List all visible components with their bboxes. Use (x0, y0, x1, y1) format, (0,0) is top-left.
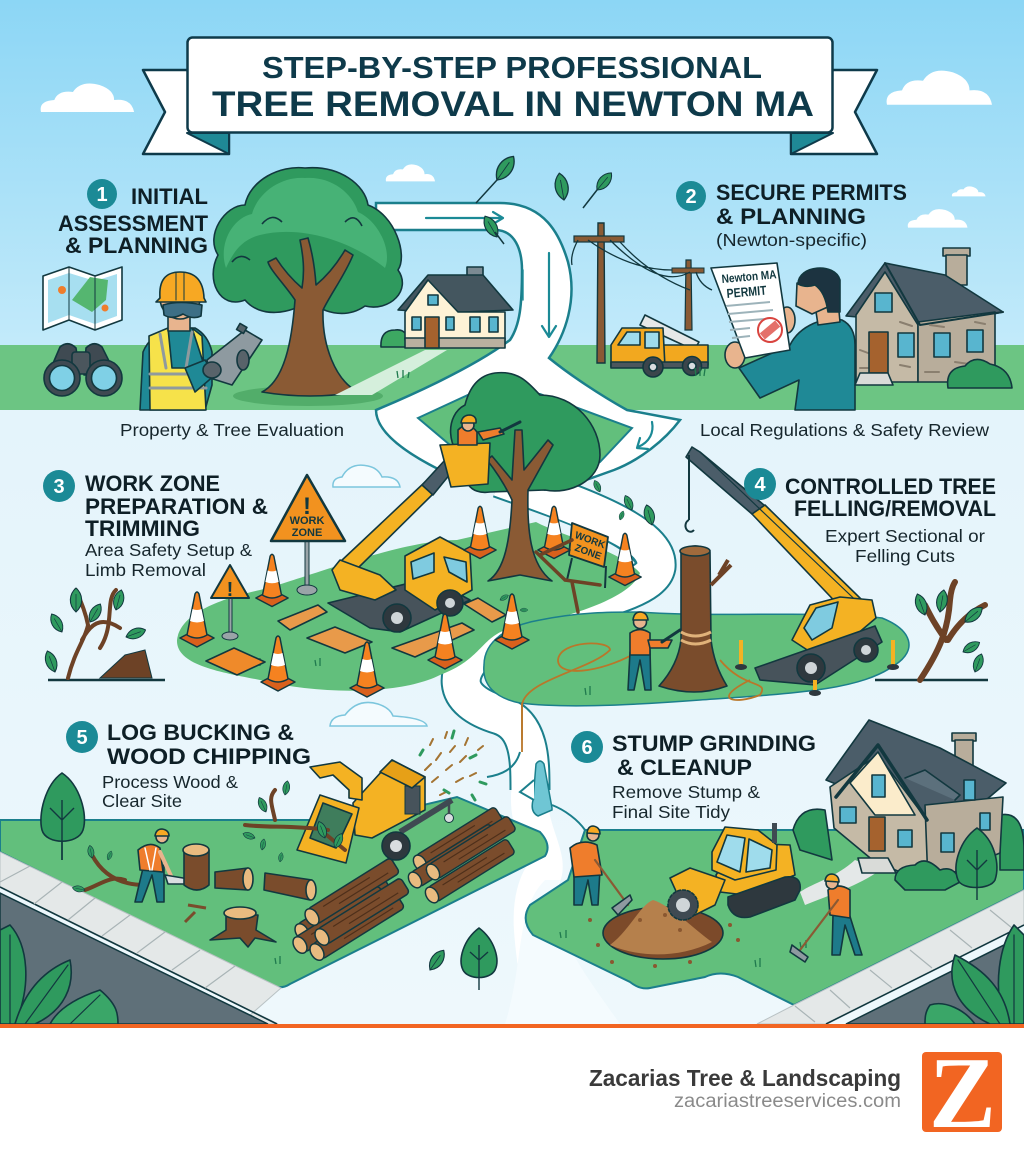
title banner (143, 38, 877, 154)
hopper (297, 795, 359, 863)
ribbon left (143, 70, 229, 154)
step 3 heading: TRIMMING (85, 516, 200, 541)
crane cab (792, 597, 876, 655)
illustration: bare tree left (42, 588, 165, 680)
permit document (711, 263, 790, 358)
boom (340, 482, 435, 572)
illustration: bucking worker and logs (72, 806, 516, 963)
step 5 heading: LOG BUCKING & (107, 720, 294, 745)
icon: work zone barricade (567, 523, 608, 588)
log round 1 (215, 868, 248, 890)
bucket worker (458, 415, 520, 445)
step 6 heading: Remove Stump & (612, 782, 760, 802)
illustration: map (43, 267, 122, 330)
garden tree (956, 828, 997, 888)
worker (135, 829, 195, 902)
bucket (440, 443, 490, 487)
upright log (184, 850, 209, 890)
crane carrier (755, 626, 882, 685)
step 4 heading: CONTROLLED TREE (785, 474, 996, 499)
step 6 heading: STUMP GRINDING (612, 731, 816, 756)
turret (332, 560, 396, 600)
wood bits (185, 905, 206, 922)
icon: big work zone sign: WORK (290, 515, 324, 527)
step 1 heading: 1 (96, 184, 108, 206)
step 2 heading (676, 180, 907, 250)
chip spray (420, 731, 486, 800)
step 3 heading: WORK ZONE (85, 471, 220, 496)
illustration: permit holder (711, 263, 855, 410)
crane hook line (688, 455, 690, 520)
cab (405, 537, 472, 610)
grinder head (670, 868, 725, 915)
trunk (262, 238, 358, 396)
right log pile (406, 806, 516, 905)
step 5 heading: 5 (76, 727, 88, 749)
step 2 heading: (Newton-specific) (716, 230, 867, 250)
step 4 heading: FELLING/REMOVAL (794, 496, 996, 521)
step 3 heading: PREPARATION & (85, 494, 268, 519)
step 1 heading: INITIAL (131, 184, 208, 209)
step 1 heading: & PLANNING (65, 233, 208, 258)
step 6 heading: 6 (581, 737, 593, 759)
sky background (0, 0, 1024, 411)
step 3 heading: Limb Removal (85, 560, 206, 580)
step 6 heading: & CLEANUP (617, 755, 752, 780)
footer background (0, 1028, 1024, 1154)
permit subheading: PERMIT (726, 283, 767, 301)
illustration: small house (381, 267, 513, 348)
illustration: driveway (335, 350, 447, 395)
step 3 heading: Area Safety Setup & (85, 540, 252, 560)
grass: work zone (177, 522, 640, 691)
footer accent line (0, 1024, 1024, 1028)
wheel (382, 832, 410, 860)
ribbon right (791, 70, 877, 154)
illustration: traffic cones (180, 506, 641, 697)
illustration: big tree (213, 168, 402, 406)
illustration: third house (793, 720, 1024, 905)
body (716, 843, 795, 895)
illustration: stump grinder (588, 823, 800, 968)
step 2 heading: SECURE PERMITS (716, 180, 907, 205)
step 4 heading: 4 (754, 474, 766, 496)
grass: chipping area (0, 797, 548, 987)
illustration: boom lift truck (328, 415, 520, 632)
canopy (213, 168, 402, 313)
chute (310, 762, 362, 800)
sawyer (628, 612, 680, 690)
step 5 heading: Process Wood & (102, 772, 238, 792)
footer company name: Zacarias Tree & Landscaping (589, 1065, 901, 1091)
chipper body (353, 760, 425, 838)
left log pile (290, 857, 410, 963)
illustration: surveyor worker (140, 272, 262, 410)
title line 2: TREE REMOVAL IN NEWTON MA (212, 85, 814, 124)
step 1 heading: ASSESSMENT (58, 211, 209, 236)
flatbed (328, 578, 470, 632)
cab (712, 827, 777, 880)
step 3 heading (43, 470, 268, 580)
illustration: fallen branch and debris (499, 479, 657, 612)
lower panel background (0, 410, 1024, 1025)
illustration: center tree canopy (451, 373, 600, 492)
illustration: stone house (846, 248, 1012, 388)
icon: big work zone sign: ZONE (292, 527, 322, 539)
clouds (41, 71, 992, 726)
step 4 heading (744, 468, 996, 566)
step 5 heading: WOOD CHIPPING (107, 744, 311, 769)
illustration: bare tree right (875, 582, 988, 680)
footer website: zacariastreeservices.com (674, 1091, 901, 1112)
footer logo: Z (929, 1037, 996, 1150)
illustration: crane and log (522, 447, 899, 740)
title line 1: STEP-BY-STEP PROFESSIONAL (262, 50, 762, 85)
banner box (188, 38, 832, 132)
illustration: raking workers (570, 826, 862, 962)
person (725, 268, 855, 410)
grass: felling area (484, 612, 909, 706)
illustration: corner plant right (925, 925, 1024, 1024)
icon: small warning sign: ! (227, 579, 233, 601)
top grass band (0, 345, 1024, 410)
stump (210, 915, 276, 947)
stamp (758, 318, 782, 342)
icon: small warning sign (211, 565, 249, 640)
illustration: utility poles and wires (572, 223, 712, 363)
cut branch (85, 855, 145, 890)
step 2 heading: 2 (685, 186, 697, 208)
illustration: wood chipper (242, 731, 486, 863)
dirt mound (603, 907, 723, 959)
clipboard (207, 330, 262, 385)
step 2 heading: & PLANNING (716, 204, 866, 229)
permit heading: Newton MA (721, 267, 777, 286)
illustration: center tree trunk (487, 430, 553, 581)
step 4 heading: Felling Cuts (855, 546, 955, 566)
winding path (376, 203, 680, 1024)
floating leaves (476, 153, 615, 244)
central grass island (418, 394, 632, 490)
rope (522, 643, 762, 740)
step 3 heading: 3 (53, 476, 65, 498)
tracks (728, 877, 800, 918)
step 1 caption: Property & Tree Evaluation (120, 420, 344, 440)
illustration: grass hatches and tufts (255, 367, 806, 967)
step 6 heading (571, 731, 816, 822)
sidewalk and street right (757, 890, 1024, 1024)
step 5 heading (66, 720, 311, 811)
path arrows (426, 212, 652, 449)
illustration: binoculars (44, 344, 122, 396)
branch in hopper (245, 790, 345, 850)
ribbon folds (187, 133, 833, 154)
illustration: bucket truck (611, 315, 708, 377)
grass: stump area (526, 830, 1024, 1005)
step 5 heading: Clear Site (102, 791, 182, 811)
log (659, 546, 727, 692)
crane boom (686, 447, 770, 522)
illustration: lawn trees (41, 773, 497, 990)
icon: work zone barricade: ZONE (573, 543, 603, 563)
illustration: work zone boards (206, 598, 506, 675)
log round 2 (264, 873, 312, 900)
step 6 heading: Final Site Tidy (612, 802, 730, 822)
step 2 caption: Local Regulations & Safety Review (700, 420, 989, 440)
icon: big work zone sign (271, 475, 345, 595)
icon: work zone barricade: WORK (573, 530, 607, 551)
step 4 heading: Expert Sectional or (825, 526, 985, 546)
sidewalk and street left (0, 852, 281, 1024)
icon: big work zone sign: ! (303, 493, 311, 520)
illustration: teal marker on path (487, 703, 585, 830)
illustration: corner plant left (0, 925, 118, 1024)
step 1 heading (58, 179, 209, 258)
